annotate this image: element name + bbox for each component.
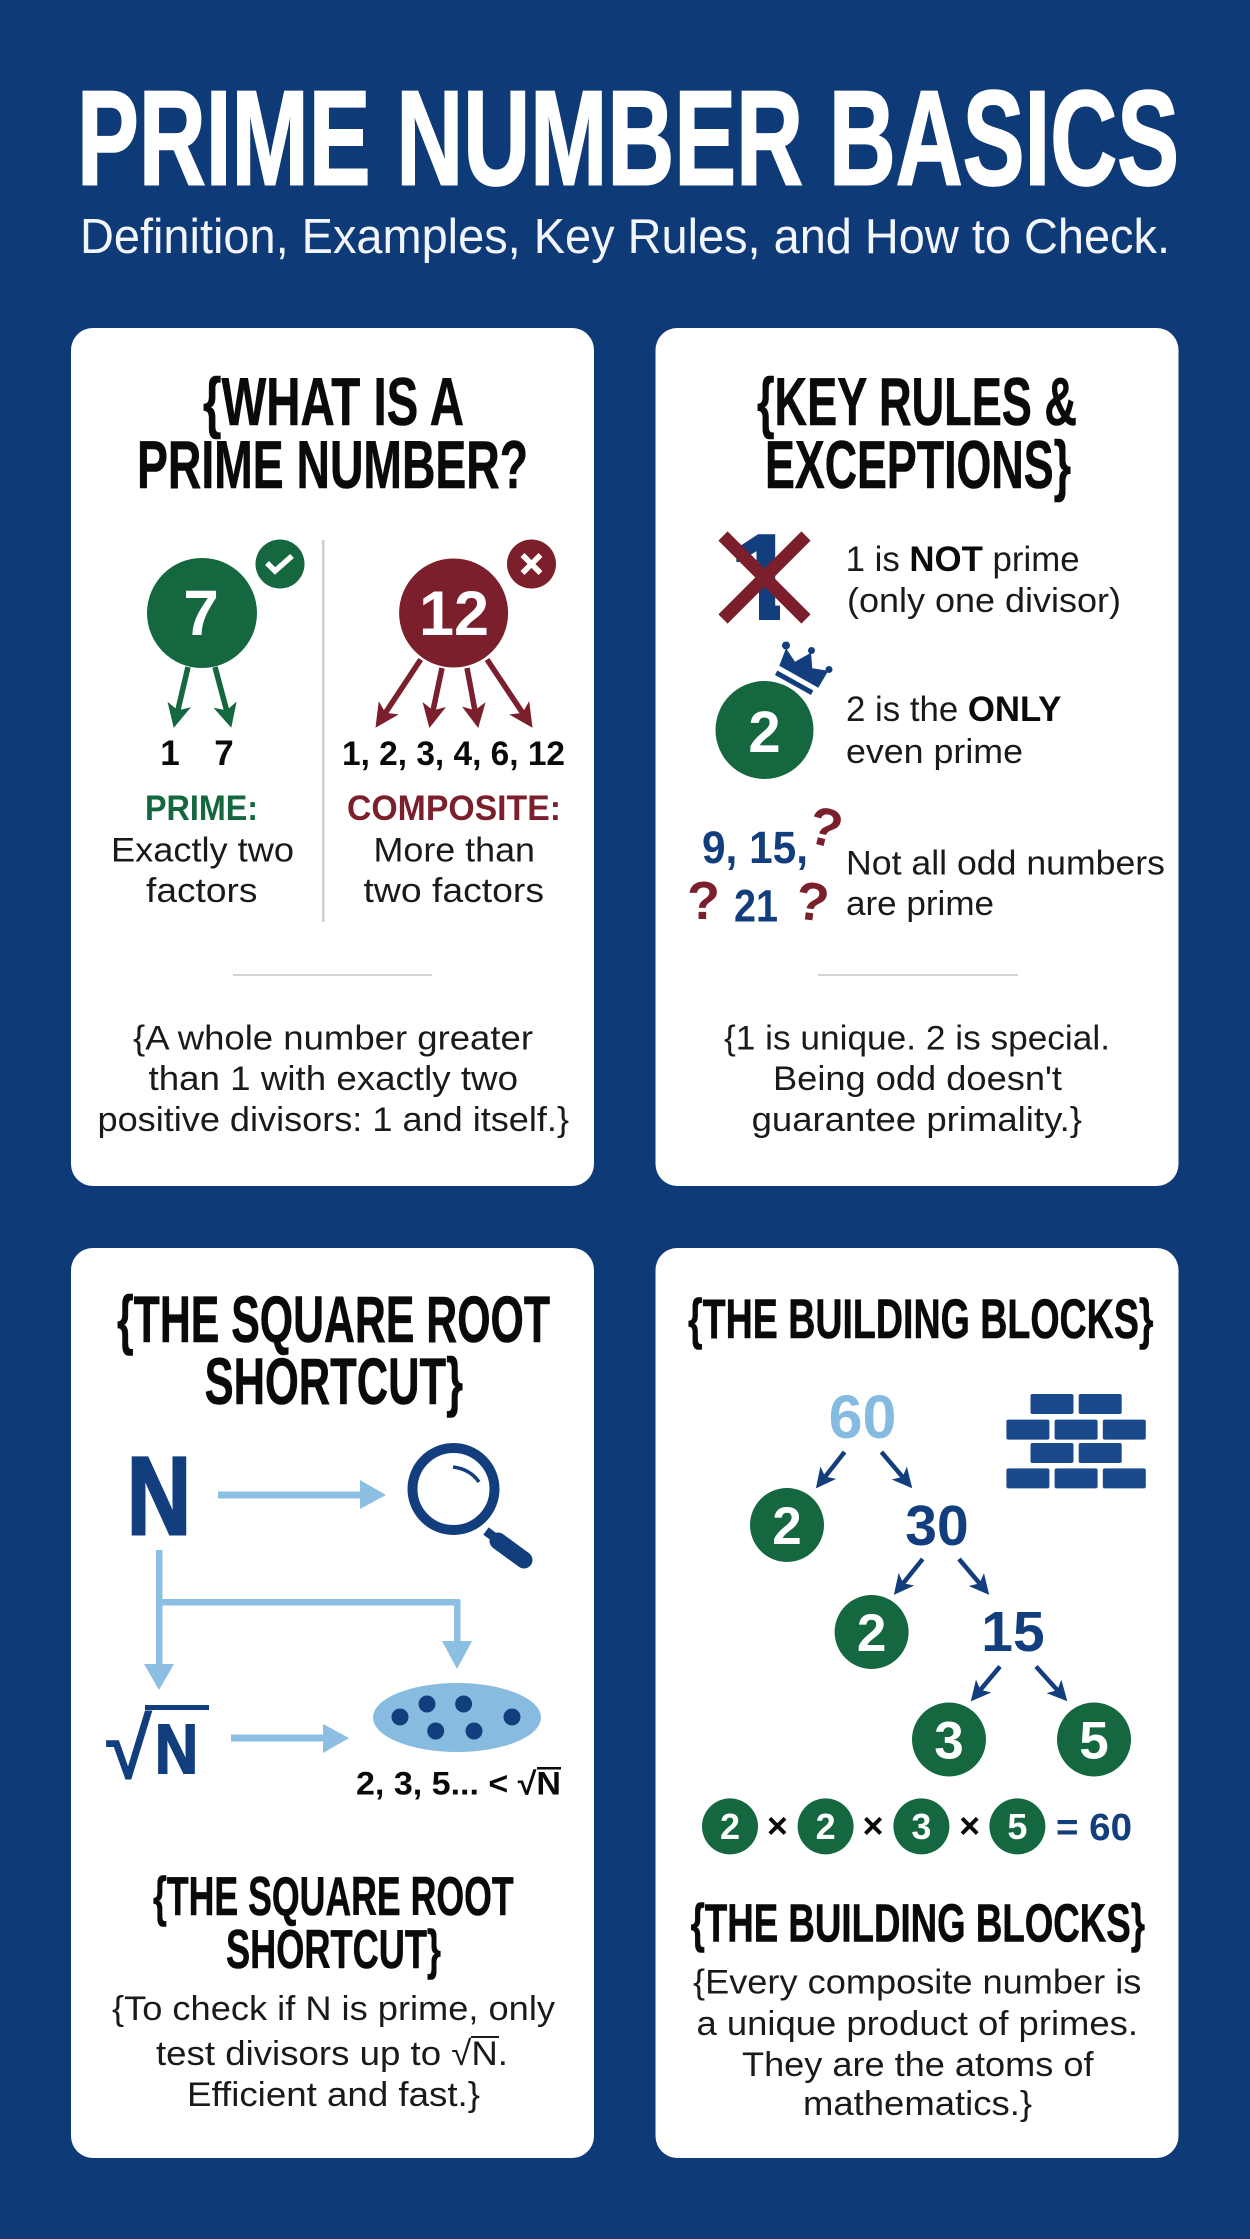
summary text: Being odd doesn't bbox=[773, 1060, 1062, 1098]
composite description bbox=[364, 832, 544, 910]
prime factorization equation: 2 bbox=[816, 1806, 836, 1847]
odd numbers with question marks: ? bbox=[802, 795, 849, 861]
prime 2 bbox=[835, 1595, 909, 1669]
rule 3 text: are prime bbox=[846, 885, 994, 923]
rule 3 text bbox=[846, 844, 1165, 923]
summary text bbox=[724, 1020, 1110, 1139]
prime 2: 2 bbox=[857, 1604, 886, 1663]
body text: a unique product of primes. bbox=[696, 2005, 1138, 2043]
tree arrows bbox=[819, 1452, 1064, 1698]
rule 2 text bbox=[846, 690, 1061, 771]
arrow: branch to primes bbox=[160, 1599, 472, 1669]
rule 2 text: 2 is the ONLY bbox=[846, 690, 1061, 729]
heading bbox=[117, 1282, 550, 1418]
label: prime: PRIME: bbox=[145, 789, 258, 828]
body text bbox=[693, 1964, 1141, 2123]
body text bbox=[112, 1990, 556, 2114]
arrow: N to magnifier bbox=[218, 1480, 386, 1509]
primes below root N: 2, 3, 5... < √N bbox=[356, 1765, 561, 1801]
prime factorization equation: 3 bbox=[911, 1806, 931, 1847]
heading: {WHAT IS A bbox=[203, 364, 464, 440]
icon: x badge bbox=[507, 540, 556, 588]
number 15: 15 bbox=[981, 1600, 1045, 1664]
prime 5: 5 bbox=[1079, 1712, 1109, 1770]
arrow: N to root N bbox=[144, 1550, 174, 1690]
number 30: 30 bbox=[905, 1494, 969, 1558]
prime factorization equation: × bbox=[959, 1805, 980, 1846]
icon: brick wall bbox=[1006, 1394, 1146, 1488]
icon: crossed out 1: 1 bbox=[729, 509, 797, 645]
summary text: {1 is unique. 2 is special. bbox=[724, 1020, 1110, 1058]
definition text: positive divisors: 1 and itself.} bbox=[98, 1101, 569, 1139]
odd numbers with question marks: ? bbox=[687, 871, 720, 931]
prime 5 bbox=[1057, 1702, 1131, 1776]
panel: key rules and exceptions bbox=[656, 328, 1178, 1186]
panel: square root shortcut bbox=[71, 1248, 594, 2158]
definition text: {A whole number greater bbox=[133, 1020, 533, 1058]
heading: SHORTCUT} bbox=[205, 1344, 463, 1418]
subheading: SHORTCUT} bbox=[226, 1918, 441, 1980]
summary text: guarantee primality.} bbox=[752, 1101, 1082, 1139]
prime 3 bbox=[912, 1702, 986, 1776]
subheading bbox=[153, 1865, 514, 1980]
composite description: More than bbox=[374, 832, 535, 870]
arrows: factors of 7 bbox=[175, 667, 230, 722]
prime factorization equation: × bbox=[862, 1805, 884, 1846]
composite example: 12 bbox=[342, 540, 565, 910]
factors of 7: 7 bbox=[214, 734, 234, 773]
body text: They are the atoms of bbox=[742, 2046, 1094, 2084]
panel: what is a prime number bbox=[71, 328, 594, 1186]
heading: EXCEPTIONS} bbox=[765, 427, 1071, 503]
rule 3 text: Not all odd numbers bbox=[846, 844, 1165, 882]
root N symbol: N bbox=[155, 1710, 198, 1788]
icon: check badge bbox=[256, 540, 304, 588]
panel: building blocks bbox=[656, 1248, 1178, 2158]
factor tree bbox=[750, 1383, 1131, 1776]
root N symbol bbox=[105, 1702, 209, 1796]
definition text bbox=[98, 1020, 569, 1139]
icon: circle 7 bbox=[147, 558, 257, 668]
prime example: 7 bbox=[111, 540, 304, 910]
prime factorization equation: 2 bbox=[720, 1806, 740, 1847]
body text: test divisors up to √N. bbox=[156, 2035, 508, 2073]
prime description bbox=[111, 832, 294, 910]
heading: {THE SQUARE ROOT bbox=[117, 1282, 550, 1356]
odd numbers with question marks: 21 bbox=[734, 880, 778, 932]
root N symbol: √ bbox=[105, 1702, 152, 1796]
rule 1 text bbox=[846, 540, 1121, 620]
definition text: than 1 with exactly two bbox=[148, 1060, 518, 1098]
heading bbox=[137, 364, 528, 503]
icon: crossed out 1 bbox=[718, 531, 810, 624]
letter N: N bbox=[127, 1435, 191, 1558]
prime 3: 3 bbox=[934, 1712, 964, 1770]
arrows: factors of 12 bbox=[379, 660, 529, 723]
prime factorization equation: 5 bbox=[1007, 1806, 1027, 1847]
icon: circle 12: 12 bbox=[419, 579, 489, 649]
factors of 7 bbox=[160, 734, 234, 773]
icon: circle 7: 7 bbox=[183, 577, 219, 649]
body text: {To check if N is prime, only bbox=[112, 1990, 556, 2028]
prime dots ellipse bbox=[373, 1683, 541, 1752]
heading bbox=[757, 364, 1077, 503]
prime description: factors bbox=[146, 872, 258, 910]
body text: mathematics.} bbox=[803, 2085, 1032, 2123]
heading: PRIME NUMBER? bbox=[137, 427, 528, 503]
prime factorization equation: = 60 bbox=[1056, 1807, 1132, 1849]
icon: magnifying glass bbox=[412, 1448, 524, 1560]
number 60: 60 bbox=[829, 1383, 896, 1451]
icon: crown bbox=[775, 642, 832, 695]
subtitle: Definition, Examples, Key Rules, and How to Check. bbox=[80, 210, 1170, 264]
prime 2 bbox=[750, 1488, 824, 1562]
prime factorization equation bbox=[702, 1798, 1132, 1854]
prime 2: 2 bbox=[772, 1497, 802, 1556]
arrow: root N to primes bbox=[231, 1724, 349, 1753]
prime description: Exactly two bbox=[111, 832, 294, 870]
composite description: two factors bbox=[364, 872, 544, 910]
icon: circle 12 bbox=[399, 558, 508, 668]
factors of 7: 1 bbox=[160, 734, 180, 773]
body text: {Every composite number is bbox=[693, 1964, 1141, 2002]
odd numbers with question marks: ? bbox=[792, 870, 833, 934]
odd numbers with question marks bbox=[687, 795, 849, 934]
rule 2 text: even prime bbox=[846, 733, 1023, 771]
rule 1 text: 1 is NOT prime bbox=[846, 540, 1080, 579]
label: composite: COMPOSITE: bbox=[347, 789, 561, 828]
body text: Efficient and fast.} bbox=[187, 2076, 480, 2114]
prime factorization equation: × bbox=[767, 1805, 788, 1846]
rule 1 text: (only one divisor) bbox=[847, 582, 1121, 620]
subheading: {THE SQUARE ROOT bbox=[153, 1865, 514, 1927]
heading: {KEY RULES & bbox=[757, 364, 1077, 440]
icon: green 2 with crown bbox=[716, 642, 832, 779]
icon: green 2 with crown: 2 bbox=[748, 700, 781, 765]
factors of 12: 1, 2, 3, 4, 6, 12 bbox=[342, 735, 565, 773]
odd numbers with question marks: 9, 15, bbox=[702, 822, 808, 873]
